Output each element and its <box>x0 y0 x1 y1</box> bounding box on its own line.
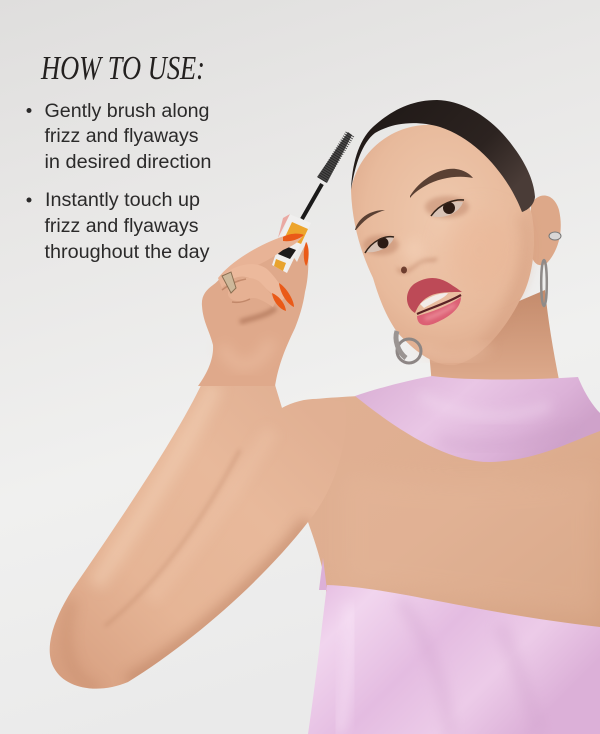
instructions list: Instantly touch up <box>45 190 200 211</box>
left eye <box>363 235 399 255</box>
nose <box>398 238 436 274</box>
mascara tube <box>272 214 311 273</box>
dress <box>308 585 600 734</box>
instructions list: throughout the day <box>44 242 210 263</box>
hand: palm and back fingers <box>198 242 308 386</box>
hair <box>351 100 535 212</box>
face <box>351 125 534 365</box>
lips <box>407 278 462 325</box>
eyebrows <box>355 169 473 230</box>
thumb <box>218 235 303 288</box>
index finger <box>222 264 286 302</box>
finger creases <box>222 279 250 302</box>
mascara wand <box>302 132 352 219</box>
scarf <box>355 376 600 462</box>
neck <box>428 290 560 385</box>
instructions list: frizz and flyaways <box>44 216 198 237</box>
earring: left hoop <box>396 331 421 363</box>
palm shading <box>222 308 276 365</box>
instructions list: in desired direction <box>44 152 212 173</box>
torso <box>282 396 600 640</box>
instructions list <box>26 101 212 263</box>
earring: right hoop and cuff <box>541 232 561 306</box>
instructions list: frizz and flyaways <box>44 126 198 147</box>
ear <box>530 195 561 265</box>
dress strap <box>319 558 327 590</box>
middle finger <box>228 278 276 307</box>
instructions list: Gently brush along <box>44 101 210 122</box>
orange nails <box>272 234 309 311</box>
arm <box>50 385 318 689</box>
ring <box>222 272 236 293</box>
chest shading <box>340 470 600 620</box>
right eye <box>425 196 469 218</box>
title: HOW TO USE: <box>40 50 205 87</box>
